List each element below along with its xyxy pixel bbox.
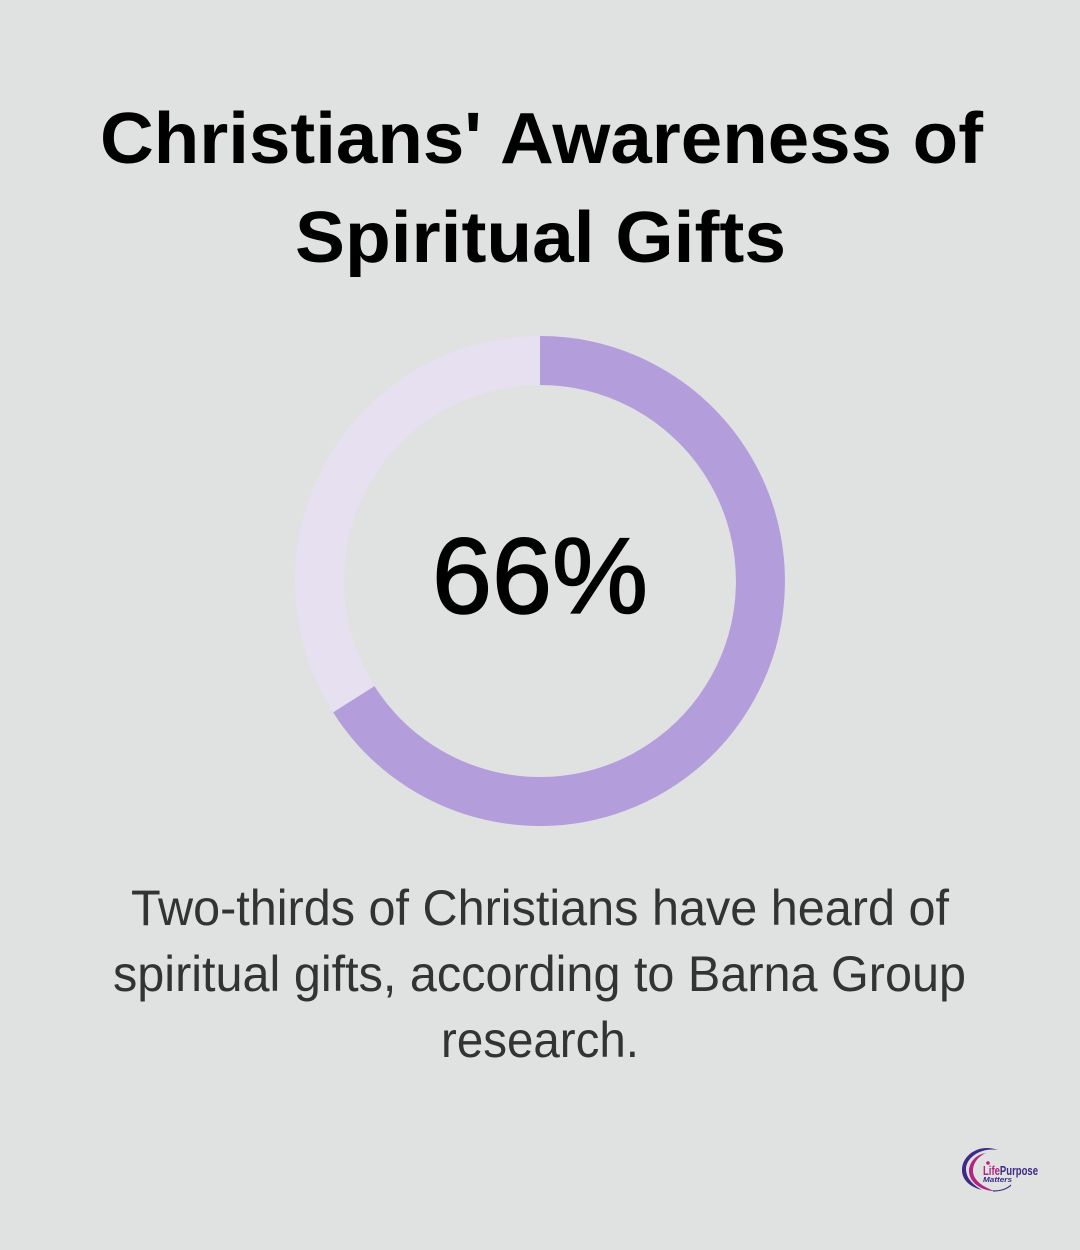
logo tagline: Matters [983,1175,1012,1184]
ring track [320,360,760,802]
title [100,99,984,278]
description text: spiritual gifts, according to Barna Group [113,946,966,1002]
logo lower arc [993,1185,1011,1191]
description text: Two-thirds of Christians have heard of [131,880,949,936]
percentage value: 66% [432,515,648,636]
ring value arc [354,360,760,802]
description text [113,880,966,1068]
logo: Life Purpose Matters [962,1148,1038,1191]
title: Christians' Awareness of [100,99,984,179]
logo wordmark: LifePurpose [983,1164,1038,1178]
donut chart: 66% [320,360,760,802]
logo inner arc [969,1153,995,1191]
description text: research. [441,1012,639,1068]
title: Spiritual Gifts [295,198,786,278]
logo heart [986,1161,990,1165]
logo outer arc [962,1148,998,1190]
